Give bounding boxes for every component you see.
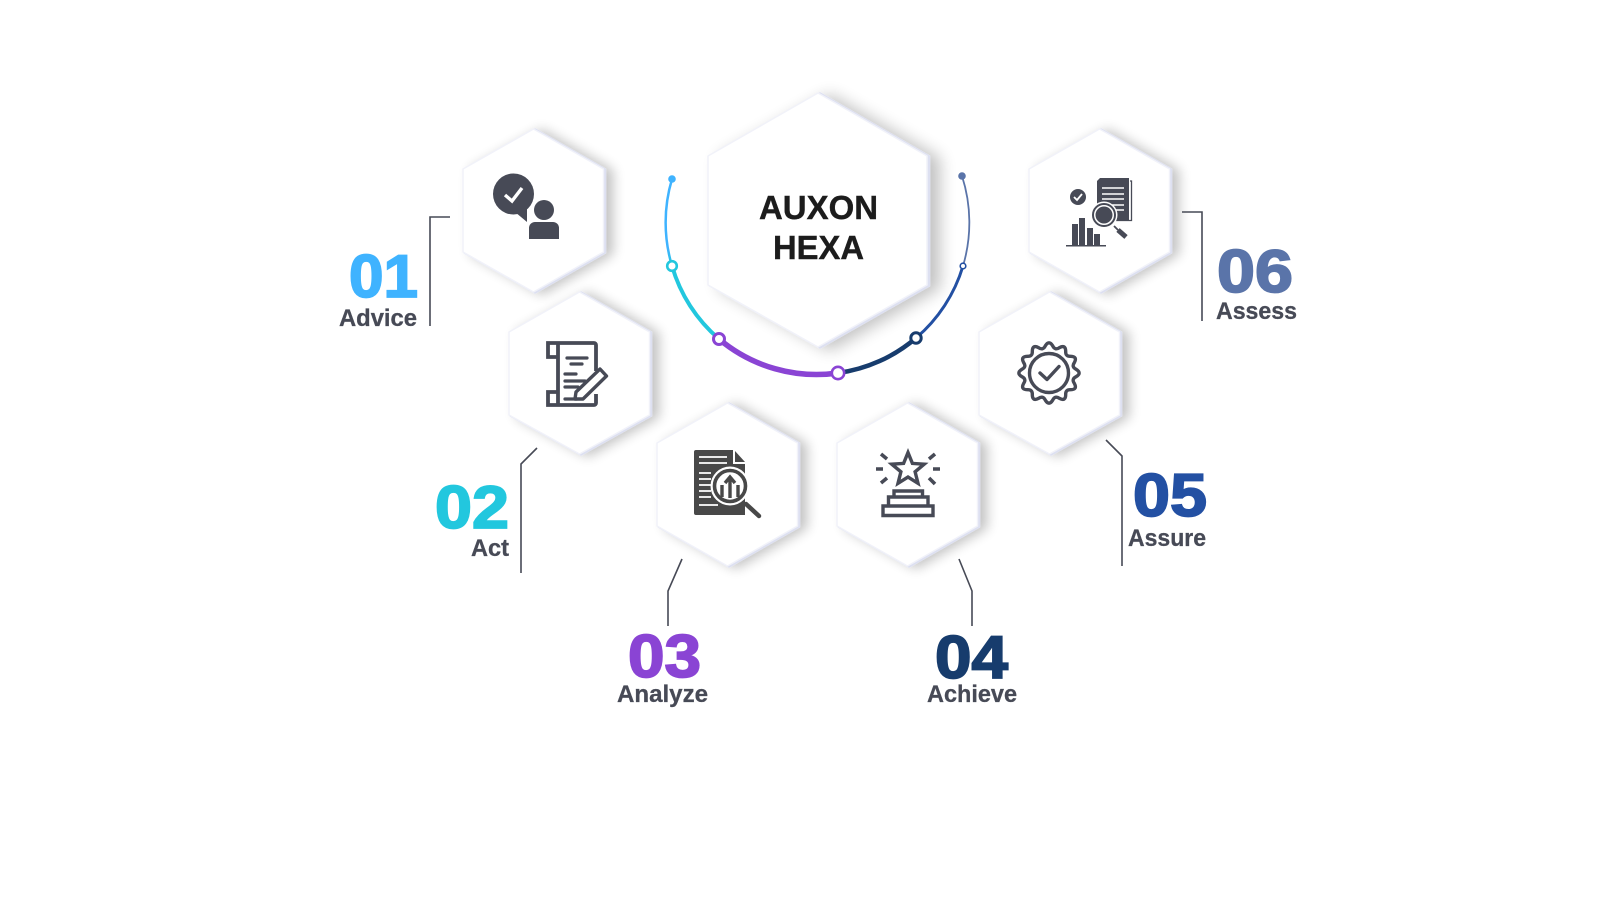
connector: 04: [959, 559, 972, 626]
label: 03 Analyze: 03: [628, 623, 701, 690]
label: 02 Act: [435, 474, 509, 562]
label: 04 Achieve: Achieve: [927, 681, 1017, 708]
panel: central hexagon: AUXON: [759, 189, 878, 226]
label: 06 Assess: Assess: [1216, 298, 1297, 325]
label: 03 Analyze: [617, 623, 708, 708]
connector: 06: [1182, 212, 1202, 321]
label: 06 Assess: 06: [1217, 238, 1293, 305]
label: 01 Advice: 01: [349, 243, 418, 310]
arc: six coloured segments: [666, 172, 969, 379]
label: 03 Analyze: Analyze: [617, 681, 708, 708]
panel: hexagon 03 Analyze: [657, 403, 799, 566]
panel: hexagon 04 Achieve: [837, 403, 979, 566]
panel: hexagon 06 Assess: [1029, 129, 1171, 292]
icon: document with magnifier: [694, 450, 759, 516]
label: 05 Assure: 05: [1133, 462, 1207, 529]
label: 05 Assure: Assure: [1128, 525, 1206, 552]
panel: central hexagon: [708, 93, 929, 348]
label: 01 Advice: Advice: [339, 305, 417, 332]
label: 05 Assure: [1128, 462, 1207, 552]
icon: scroll with pencil: [548, 343, 606, 405]
label: 02 Act: Act: [471, 535, 509, 562]
icon: report with magnifier and bars: [1066, 178, 1132, 246]
icon: speech bubble and person: [493, 174, 559, 239]
label: 06 Assess: [1216, 238, 1297, 325]
label: 02 Act: 02: [435, 474, 509, 541]
icon: star on podium: [876, 452, 940, 516]
panel: hexagon 05 Assure: [979, 292, 1121, 454]
icon: badge with check: [1019, 343, 1079, 403]
panel: hexagon 02 Act: [509, 292, 651, 454]
label: 01 Advice: [339, 243, 418, 332]
connector: 03: [668, 559, 682, 626]
panel: central hexagon: HEXA: [773, 229, 864, 266]
connector: 05: [1106, 440, 1122, 566]
panel: hexagon 01 Advice: [463, 129, 605, 292]
label: 04 Achieve: [927, 624, 1017, 708]
connector: 01: [430, 217, 450, 326]
connector: 02: [521, 448, 537, 573]
label: 04 Achieve: 04: [935, 624, 1009, 691]
